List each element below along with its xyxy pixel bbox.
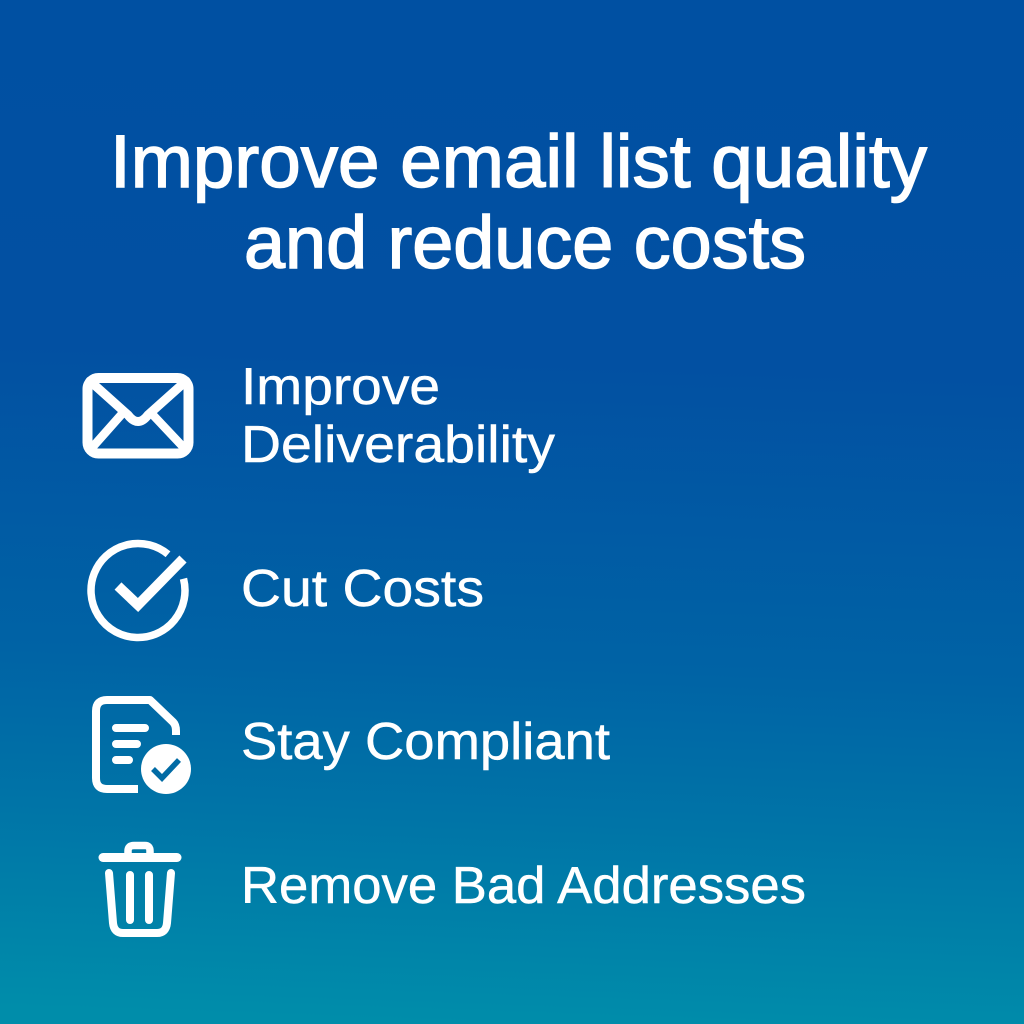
icon: envelope: [88, 378, 188, 454]
title: Improve email list quality: [110, 120, 927, 203]
label: stay compliant: Stay Compliant: [241, 713, 611, 771]
icon: trash can: [103, 846, 177, 933]
label: improve deliverability: Improve: [241, 358, 440, 416]
icon: document with check badge: [96, 700, 191, 794]
label: cut costs: Cut Costs: [241, 560, 484, 618]
item: improve deliverability: [88, 358, 555, 474]
label: improve deliverability: Deliverability: [241, 416, 555, 474]
item: remove bad addresses: [103, 846, 806, 933]
title: and reduce costs: [244, 201, 806, 284]
icon: check circle: [91, 543, 185, 637]
label: improve deliverability: [241, 358, 555, 474]
label: remove bad addresses: Remove Bad Addresses: [241, 857, 806, 915]
title: [110, 120, 927, 284]
item: stay compliant: [96, 700, 611, 794]
item: cut costs: [91, 543, 484, 637]
